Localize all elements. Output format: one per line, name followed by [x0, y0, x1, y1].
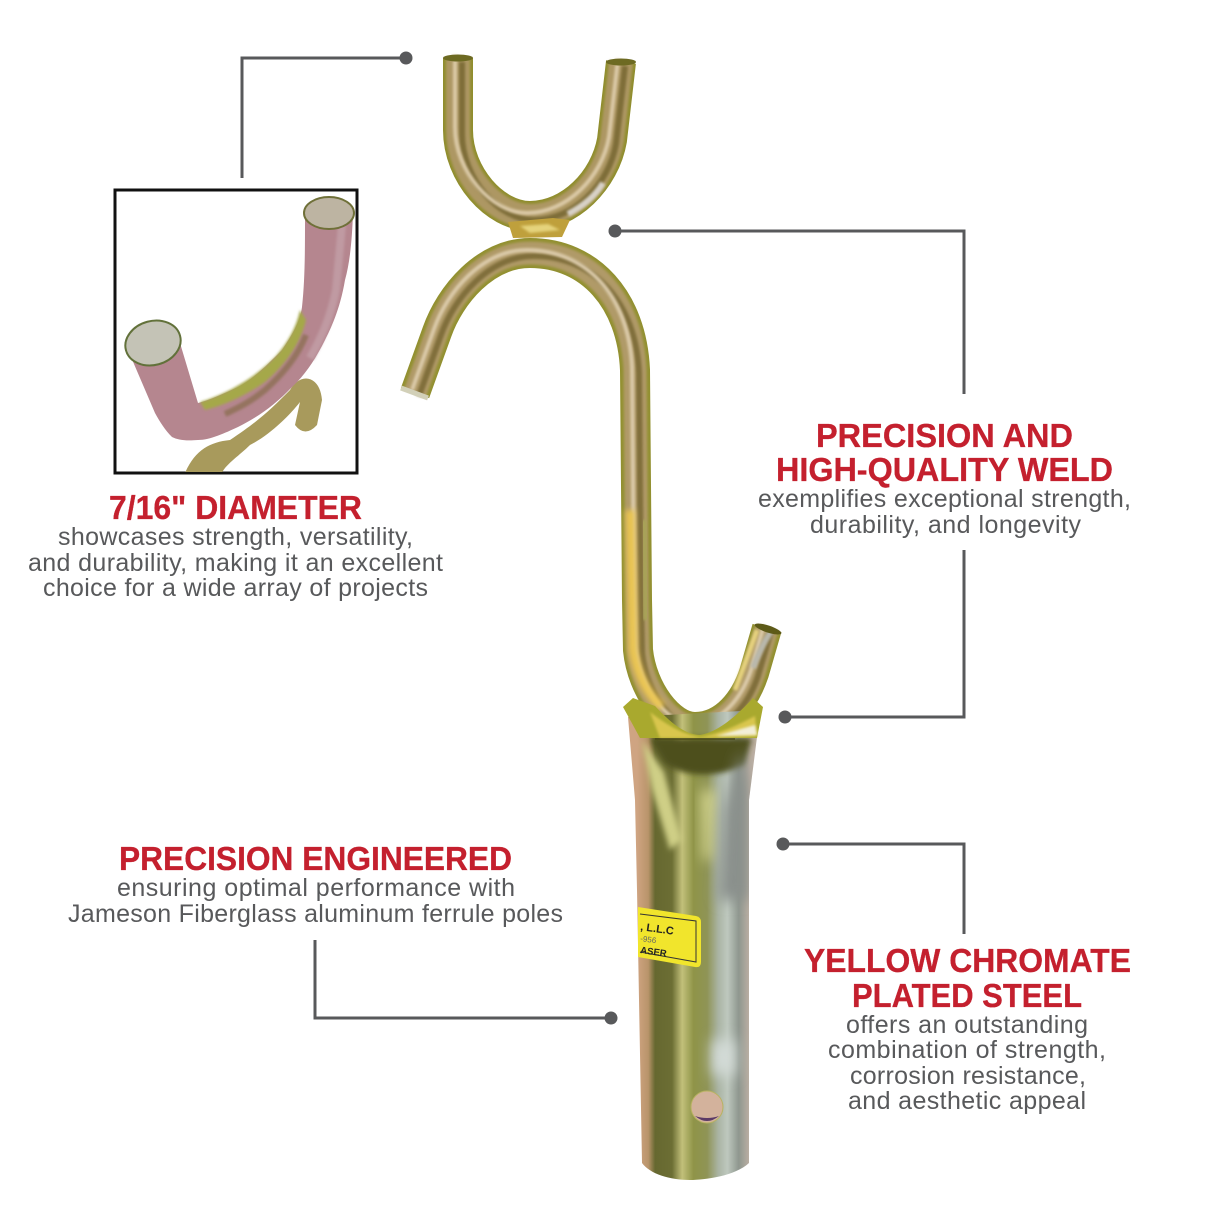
text block: weld: durability, and longevity [810, 511, 1082, 539]
text block: plated steel: corrosion resistance, [850, 1062, 1086, 1090]
text block: diameter: choice for a wide array of projects [43, 574, 428, 602]
callout line: weld lower [778, 550, 964, 724]
text block: engineered: PRECISION ENGINEERED [119, 840, 512, 877]
socket neck shading [642, 738, 752, 1075]
text block: engineered: Jameson Fiberglass aluminum ferrule poles [68, 900, 563, 928]
text block: diameter: 7/16" DIAMETER [109, 489, 362, 526]
front rod in inset [128, 213, 353, 440]
yellow label: , L.L.C [640, 921, 675, 938]
weld between fork and hook [508, 218, 570, 238]
text block: plated steel: PLATED STEEL [852, 977, 1082, 1014]
text block: weld: exemplifies exceptional strength, [758, 485, 1131, 513]
yellow label: -956 [640, 934, 657, 945]
callout line: weld [608, 224, 964, 394]
pin hole [691, 1091, 723, 1123]
panel: inset close-up photo [115, 190, 357, 473]
lower hook and shaft [401, 250, 782, 730]
text block: plated steel [804, 942, 1131, 1115]
text block: diameter: and durability, making it an excellent [28, 549, 443, 577]
text block: engineered: ensuring optimal performance with [117, 874, 515, 902]
yellow label: ASER [640, 945, 667, 960]
cut end left [124, 320, 182, 366]
text block: plated steel: YELLOW CHROMATE [804, 942, 1131, 979]
callout line: plated steel [776, 838, 964, 934]
upper Y fork [443, 54, 636, 220]
text block: engineered [68, 840, 563, 928]
text block: diameter: showcases strength, versatility, [58, 523, 413, 551]
rear rod in inset [185, 379, 322, 473]
text block: plated steel: combination of strength, [828, 1036, 1106, 1064]
weld on socket [623, 698, 763, 739]
text block: diameter [28, 489, 443, 602]
text block: plated steel: and aesthetic appeal [848, 1087, 1086, 1115]
text block: plated steel: offers an outstanding [846, 1011, 1088, 1039]
text block: weld: PRECISION AND [816, 417, 1073, 454]
callout line: engineered [315, 940, 618, 1024]
text block: weld: HIGH-QUALITY WELD [776, 451, 1113, 488]
callout line: diameter [242, 52, 412, 178]
product photo: rope hook [401, 54, 782, 1180]
text block: weld [758, 417, 1131, 539]
cut end top [304, 197, 354, 229]
yellow label [638, 907, 701, 967]
socket tube [628, 710, 760, 1180]
